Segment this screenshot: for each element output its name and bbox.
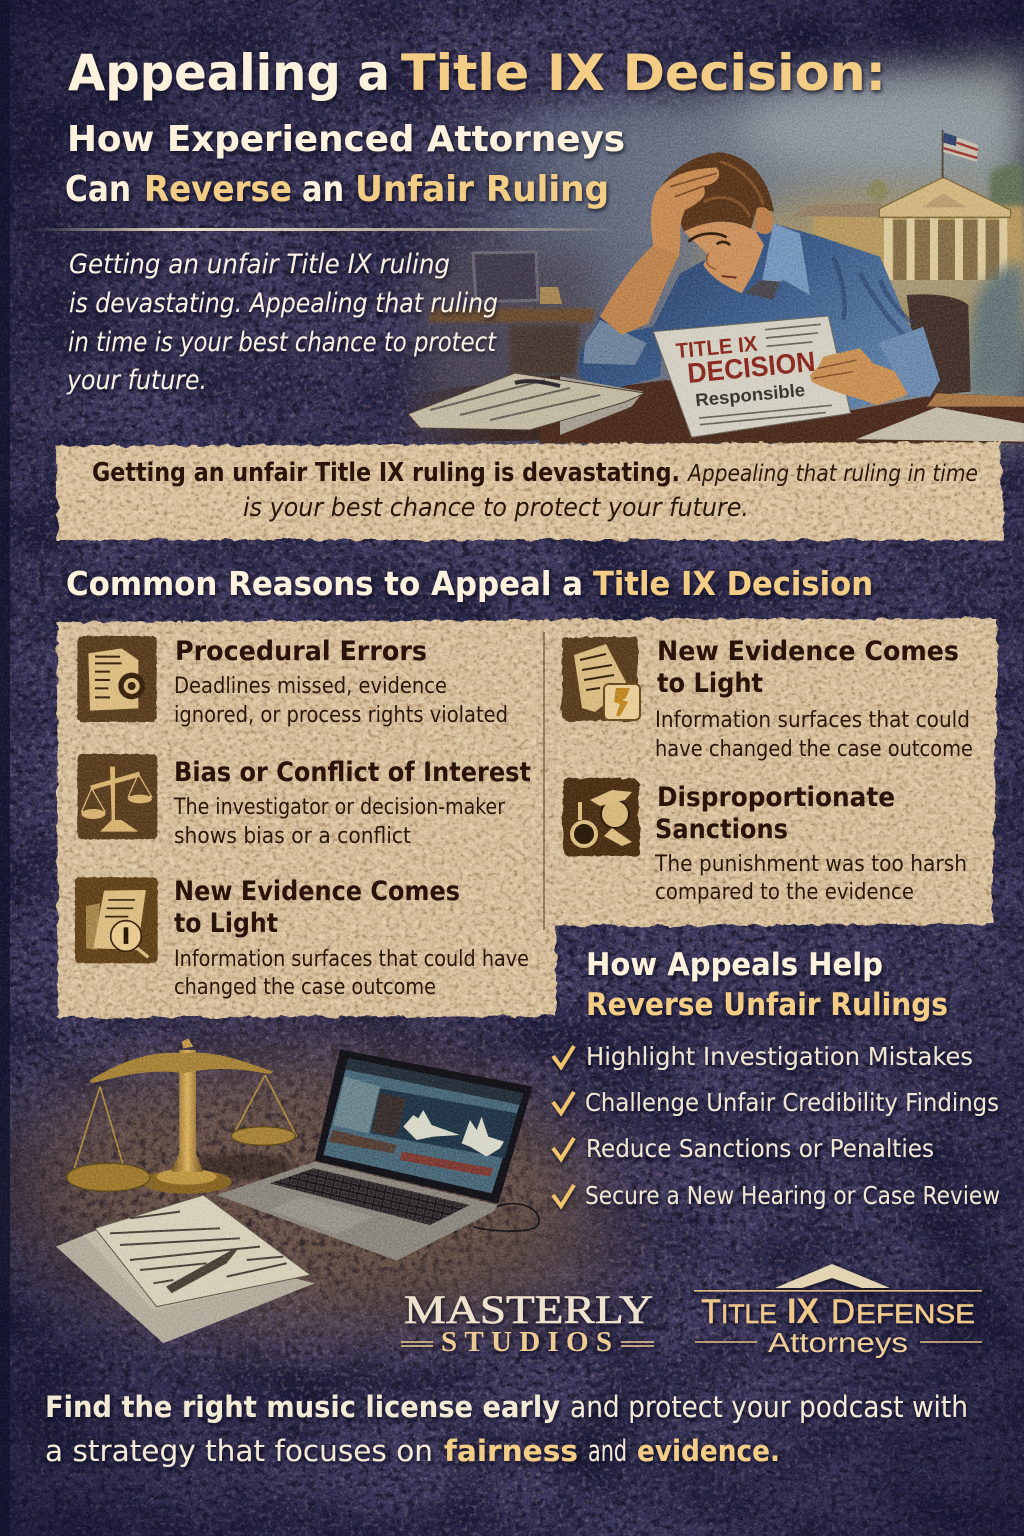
main title: Appealing a: [68, 44, 390, 102]
icon: new evidence document right: [562, 637, 640, 721]
decision paper: [653, 316, 851, 437]
decision paper: Responsible: [694, 380, 806, 410]
reason: new evidence right: Information surfaces that could: [655, 708, 970, 733]
hero illustration: distressed student with courthouse: [400, 60, 1024, 443]
how appeals help heading: Reverse Unfair Rulings: [586, 987, 948, 1023]
icon: new evidence magnifier: [75, 877, 158, 963]
logo: title ix defense attorneys: D: [831, 1293, 855, 1331]
icon: bias scales: [77, 754, 157, 839]
parchment panel: common reasons: [57, 618, 998, 1018]
logo: title ix defense attorneys: IX: [787, 1292, 820, 1331]
reason: new evidence left: New Evidence Comes: [174, 876, 460, 907]
ear: [754, 207, 773, 234]
hair: [657, 152, 774, 232]
shirt: [578, 223, 940, 410]
icon: handcuffs and stopwatch: [563, 778, 639, 856]
closing statement: fairness: [444, 1434, 578, 1468]
reason: bias or conflict: shows bias or a conflict: [174, 824, 411, 849]
intro text: is devastating. Appealing that ruling: [69, 288, 498, 319]
reason: new evidence right: to Light: [657, 668, 763, 699]
reason: new evidence left: changed the case outcome: [174, 975, 436, 1000]
logo: title ix defense attorneys: EFENSE: [856, 1299, 975, 1329]
laptop, scales and papers illustration: [56, 1038, 539, 1343]
reason: disproportionate sanctions: compared to the evidence: [655, 880, 914, 905]
closing statement: and: [588, 1434, 627, 1468]
section heading: Title IX Decision: [593, 564, 873, 603]
logo: title ix defense attorneys: Attorneys: [768, 1327, 908, 1358]
intro text: Getting an unfair Title IX ruling: [69, 249, 450, 280]
intro text: your future.: [66, 365, 207, 396]
reason: procedural errors: Deadlines missed, evidence: [174, 674, 447, 699]
reason: new evidence left: Information surfaces that could have: [174, 947, 529, 972]
reason: bias or conflict: The investigator or decision-maker: [173, 795, 506, 820]
banner text: Appealing that ruling in time: [686, 461, 978, 487]
intro text: [66, 249, 498, 396]
reason: disproportionate sanctions: Sanctions: [655, 814, 788, 845]
closing statement: Find the right music license early: [45, 1390, 560, 1424]
background desk with monitor: [400, 252, 600, 442]
reason: new evidence left: [174, 876, 529, 1000]
desk papers: [560, 377, 643, 435]
section heading: Common Reasons to Appeal a: [66, 564, 583, 603]
reason: procedural errors: Procedural Errors: [175, 636, 427, 667]
intro text: in time is your best chance to protect: [68, 327, 497, 358]
logo: title ix defense attorneys: [694, 1264, 982, 1358]
chair: [907, 294, 971, 397]
banner text: Getting an unfair Title IX ruling is devastating.: [92, 458, 680, 488]
reason: disproportionate sanctions: The punishment was too harsh: [654, 852, 967, 877]
logo: masterly studios: STUDIOS: [441, 1326, 612, 1358]
title rule: [28, 228, 623, 231]
how appeals help heading: How Appeals Help: [586, 947, 883, 983]
reason: bias or conflict: [173, 757, 531, 849]
subtitle: [65, 119, 625, 210]
subtitle: an: [302, 169, 344, 210]
papers and pen: [56, 1195, 315, 1343]
subtitle: Reverse: [144, 169, 292, 210]
reason: new evidence left: to Light: [174, 908, 278, 939]
main title: Title IX Decision:: [401, 44, 886, 102]
reason: new evidence right: have changed the case outcome: [655, 737, 973, 762]
parchment banner: [56, 442, 1004, 540]
brass scales: [67, 1038, 297, 1194]
reason: bias or conflict: Bias or Conflict of Interest: [174, 757, 531, 788]
decision paper: TITLE IX: [675, 332, 759, 363]
section heading: [66, 564, 873, 603]
desk: [540, 380, 1024, 443]
banner text: is your best chance to protect your future.: [243, 493, 749, 523]
closing statement: a strategy that focuses on: [45, 1434, 433, 1468]
how appeals help heading: [586, 947, 948, 1023]
logo: masterly studios: [401, 1287, 654, 1358]
checklist: [553, 1042, 1000, 1210]
hand on head: [651, 167, 719, 255]
decision paper: DECISION: [686, 346, 817, 389]
subtitle: Can: [65, 169, 131, 210]
closing statement: evidence.: [637, 1434, 780, 1468]
reason: new evidence right: New Evidence Comes: [657, 636, 959, 667]
logo: masterly studios: MASTERLY: [404, 1287, 653, 1332]
closing statement: and protect your podcast with: [570, 1390, 968, 1424]
courthouse with flag: [793, 130, 1024, 397]
banner text: [92, 458, 978, 523]
closing statement: [45, 1390, 968, 1468]
checklist: Highlight Investigation Mistakes: [586, 1042, 973, 1071]
reason: disproportionate sanctions: [654, 782, 967, 905]
main title: [68, 44, 886, 102]
decorative column divider: [543, 632, 545, 930]
subtitle: Unfair Ruling: [355, 169, 609, 210]
left forearm: [600, 243, 680, 335]
logo: title ix defense attorneys: ITLE: [721, 1299, 777, 1329]
right hand: [810, 348, 912, 405]
reason: disproportionate sanctions: Disproportionate: [657, 782, 895, 813]
face: [684, 222, 764, 293]
laptop: [217, 1049, 539, 1261]
icon: procedural errors document with gear: [77, 636, 157, 722]
logo: title ix defense attorneys: T: [701, 1293, 721, 1331]
reason: procedural errors: ignored, or process rights violated: [174, 703, 508, 728]
reason: procedural errors: [174, 636, 508, 728]
reason: new evidence right: [655, 636, 973, 762]
subtitle: How Experienced Attorneys: [67, 119, 625, 160]
checklist: Reduce Sanctions or Penalties: [586, 1134, 934, 1163]
